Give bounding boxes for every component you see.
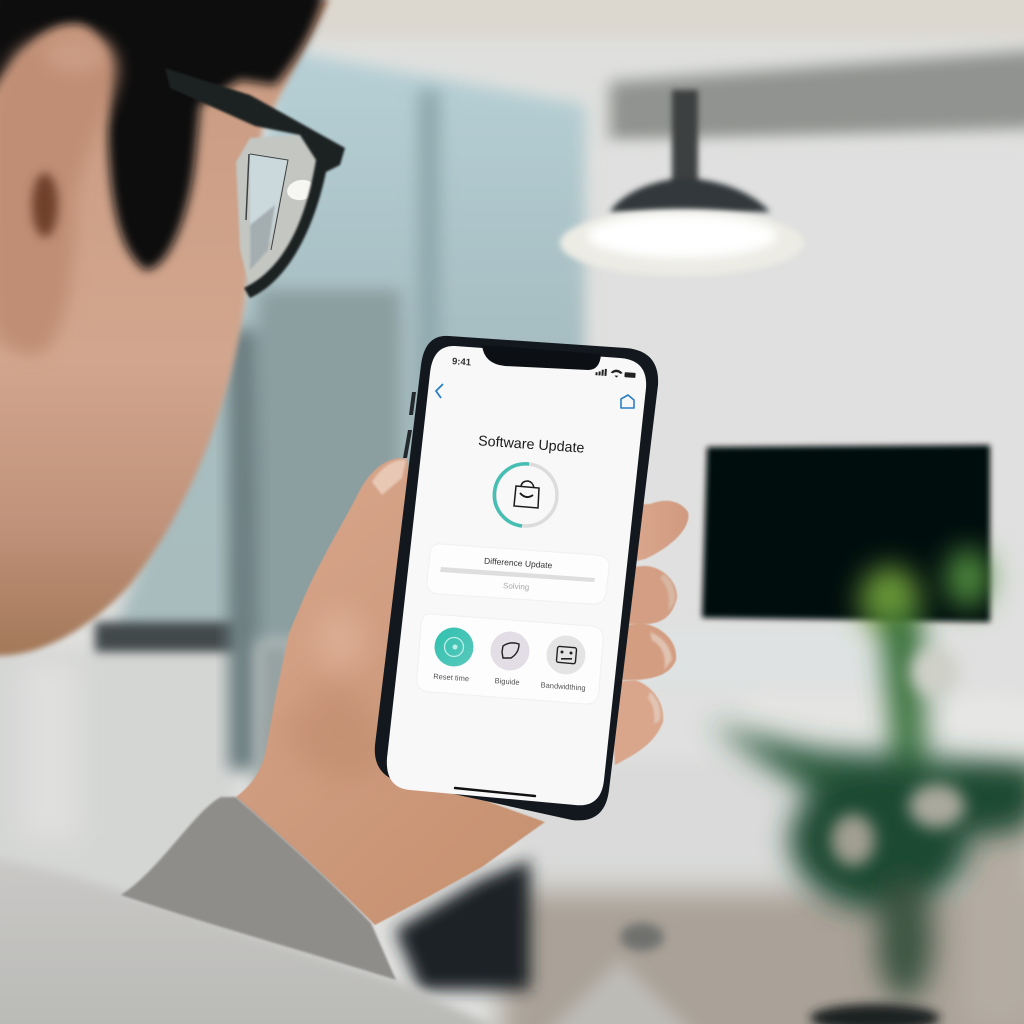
back chevron (436, 384, 443, 398)
ceiling (310, 0, 1024, 40)
glasses (165, 68, 345, 298)
plant (710, 548, 1024, 1024)
pendant lamp (560, 90, 804, 276)
update card (427, 544, 609, 604)
palm shadow (280, 680, 385, 780)
ear (0, 33, 117, 355)
home indicator (455, 788, 535, 796)
phone (375, 336, 658, 820)
card status: Solving (503, 581, 530, 592)
sleeve (121, 797, 396, 980)
lilac shortcut (490, 632, 530, 687)
side buttons (403, 392, 416, 458)
nails (648, 574, 675, 724)
phone body (375, 336, 658, 820)
window wall (110, 50, 585, 640)
lilac shortcut: Biguide (494, 676, 520, 687)
palm highlight (315, 610, 365, 670)
card title: Difference Update (484, 556, 553, 570)
hair (0, 0, 325, 270)
back fingers (620, 501, 688, 565)
screen (387, 346, 646, 805)
heading: Software Update (478, 433, 585, 457)
dark furniture under hand (395, 860, 530, 990)
ceiling beam (610, 50, 1024, 142)
palm and thumb (236, 458, 545, 925)
shortcuts card (417, 614, 603, 704)
hand (236, 458, 688, 925)
status icons (595, 368, 636, 379)
person: face and neck (0, 0, 330, 656)
icon: shopping bag (514, 481, 539, 508)
progress ring (494, 464, 557, 526)
lower left wall (0, 650, 235, 950)
teal shortcut (433, 628, 474, 683)
grey shortcut: Bandwidthing (540, 680, 586, 693)
notch (482, 345, 601, 370)
white table (600, 630, 1024, 760)
grey shortcut (540, 636, 586, 693)
status bar (452, 356, 636, 380)
progress bar (440, 567, 595, 582)
teal shortcut: Reset time (433, 672, 469, 683)
time: 9:41 (452, 356, 472, 369)
person: shirt (0, 858, 510, 1024)
window mullions (240, 90, 440, 640)
wall-mounted screen (702, 445, 990, 622)
right wall (598, 145, 1024, 765)
floor (500, 890, 1024, 1024)
home icon (621, 395, 634, 408)
lower wall (520, 760, 840, 890)
